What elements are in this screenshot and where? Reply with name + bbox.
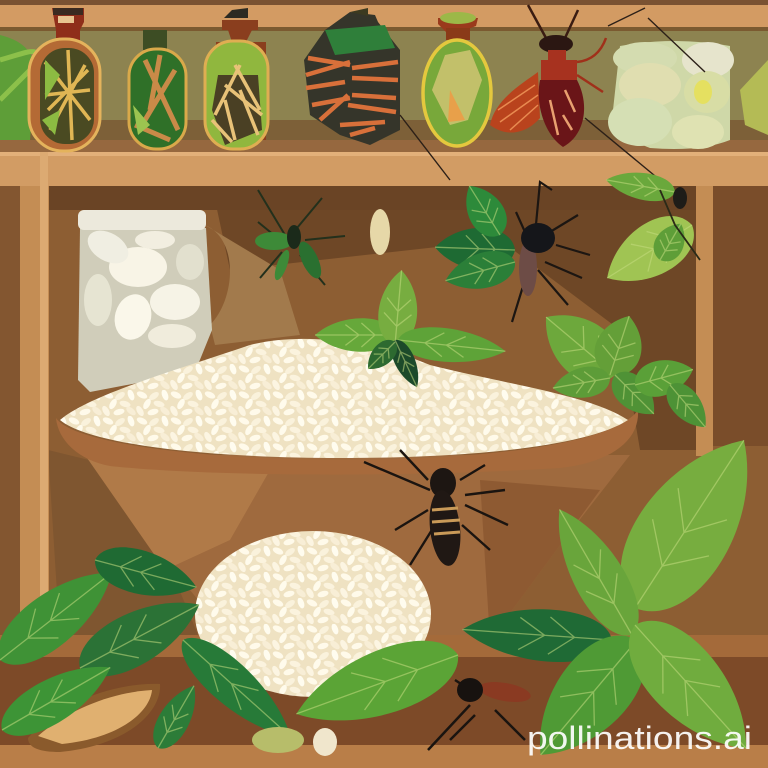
insect: green spider bug: [255, 190, 345, 285]
leaf cluster: rice sprig: [315, 269, 507, 391]
leaf cluster: bottom centre: [145, 624, 469, 756]
rice ball: [195, 531, 431, 697]
jar: white eggs: [78, 210, 212, 392]
panel: top shelf board: [0, 0, 768, 31]
panel: bottom shelf boards: [0, 635, 768, 768]
wood slice: [28, 684, 160, 752]
leaf cluster: bottom right: [461, 415, 768, 768]
panel: lower shelf wall: [0, 186, 768, 640]
watermark: pollinations.ai: [527, 720, 752, 756]
leaf cluster: bottom left: [0, 539, 211, 749]
leaf cluster: top right: [593, 167, 706, 300]
jar: yellow green capsule: [423, 12, 491, 146]
jar: insect specimen two: [129, 30, 186, 149]
panel: upper shelf back wall: [0, 30, 768, 150]
jar: insect specimen one: [29, 8, 100, 151]
bowl rim: [56, 410, 638, 475]
seed: [370, 209, 390, 255]
insect: red winged beetle: [490, 5, 606, 147]
leaf cluster: clover right: [528, 296, 716, 436]
jar: pale green eggs: [608, 41, 734, 149]
insect: black fly with leaf wings: [434, 176, 590, 322]
bowl body: [85, 455, 630, 640]
rice mound in bowl: [60, 339, 628, 458]
insect: black wasp on bowl: [364, 450, 508, 567]
insect: brown beetle bottom: [428, 678, 532, 750]
insect wire legs: [400, 8, 705, 190]
jar: insect specimen three: [205, 8, 268, 149]
panel: shelf posts: [20, 152, 713, 636]
jar: striped beetle pod: [304, 8, 400, 145]
panel: middle shelf board: [0, 140, 768, 186]
